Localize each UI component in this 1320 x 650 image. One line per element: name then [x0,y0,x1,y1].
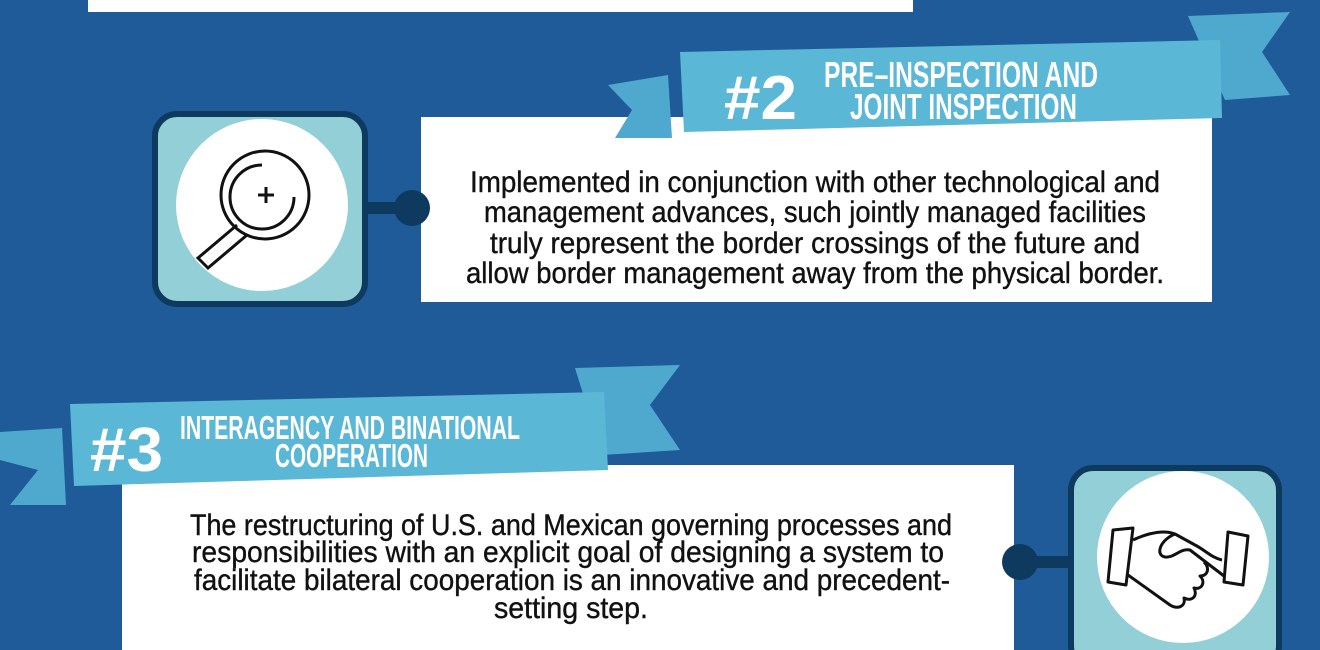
text panel #2: allow border management away from the physical border. [466,257,1164,290]
text panel #3: facilitate bilateral cooperation is an innovative and precedent- [194,564,950,597]
heading #2: JOINT INSPECTION [850,86,1077,127]
section #2 [155,12,1290,304]
ribbon: #3 header [0,365,680,505]
heading #3: COOPERATION [275,437,428,474]
heading #3 [90,409,520,485]
section #3 [0,365,1279,650]
text panel #3: The restructuring of U.S. and Mexican governing processes and [190,509,952,542]
text panel #2: management advances, such jointly managed facilities [484,196,1146,229]
icon: magnifier [155,114,365,304]
connector #3 [1002,544,1072,580]
heading #2: #2 [724,64,797,133]
text panel #2: truly represent the border crossings of the future and [490,227,1140,260]
text panel #2 [421,117,1212,302]
heading #3: INTERAGENCY AND BINATIONAL [180,409,520,446]
heading #2 [724,54,1098,133]
connector #2 [360,190,430,226]
heading #2: PRE–INSPECTION AND [824,54,1098,95]
text panel #3 [122,465,1014,650]
top white panel remnant [88,0,913,12]
heading #3: #3 [90,416,163,485]
text panel #3: responsibilities with an explicit goal of designing a system to [192,536,944,569]
icon: handshake [1071,468,1279,650]
text panel #2: Implemented in conjunction with other technological and [470,166,1160,199]
text panel #3: setting step. [494,592,648,625]
ribbon: #2 header [608,12,1290,138]
